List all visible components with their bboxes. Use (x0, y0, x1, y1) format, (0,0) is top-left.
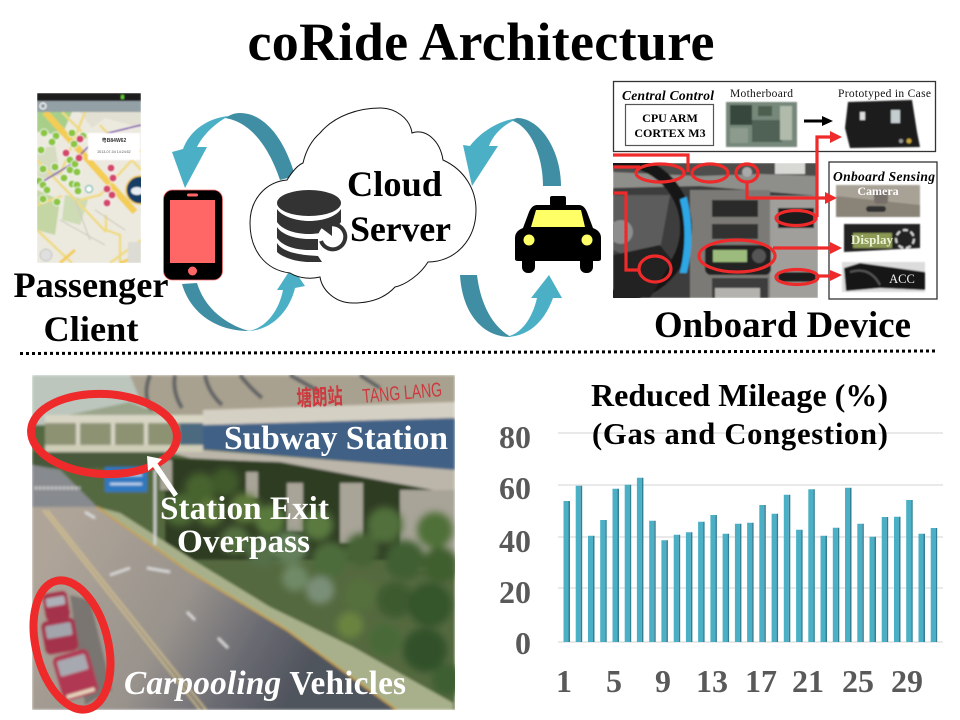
sensing heading: Onboard Sensing (833, 169, 935, 184)
CPU box (626, 104, 714, 146)
chart title: (Gas and Congestion) (592, 417, 888, 451)
arrow: taxi to cloud (463, 118, 561, 186)
subway station label: Subway Station (224, 420, 448, 457)
icon: taxi (515, 196, 601, 273)
bar side shading (568, 478, 937, 642)
y axis labels: 40 (499, 523, 531, 559)
road (32, 505, 394, 710)
panel: onboard sensing (829, 162, 937, 299)
arrow: motherboard to case (804, 116, 833, 126)
chart gridlines (558, 433, 943, 642)
arrow: cloud to phone (172, 113, 295, 188)
chart title (591, 377, 888, 451)
arrow: cloud to taxi (460, 275, 562, 337)
concrete beam (160, 450, 455, 494)
server label: Cloud (347, 164, 442, 204)
x axis labels: 1 (556, 663, 572, 699)
y axis labels: 0 (515, 625, 531, 661)
station name sign (296, 382, 442, 408)
passenger app map screenshot (37, 93, 141, 263)
chart bars (564, 478, 936, 642)
overpass (72, 402, 160, 416)
cloud server: Server (350, 209, 451, 249)
passenger app map screenshot: 粤B84W62 (102, 137, 126, 144)
cloud server (250, 108, 476, 303)
title: coRide Architecture (248, 12, 714, 72)
passenger app map screenshot: 2013-07-04 14:24:52 (97, 150, 131, 154)
station street photo (32, 375, 464, 710)
grass bank (120, 513, 453, 710)
passenger client label (14, 265, 168, 349)
y axis labels: 80 (499, 419, 531, 455)
panel: central control (614, 82, 936, 152)
passenger client label: Client (44, 309, 138, 349)
glass band (203, 418, 455, 470)
station exit overpass label (160, 490, 329, 560)
chart title: Reduced Mileage (%) (591, 377, 888, 413)
station exit overpass label: Station Exit (160, 490, 329, 527)
vegetation (164, 468, 464, 696)
x axis labels: 9 (655, 663, 671, 699)
passenger client label: Passenger (14, 265, 168, 305)
x axis labels: 17 (745, 663, 777, 699)
lane lines (43, 510, 206, 710)
y axis labels (499, 419, 531, 661)
ACC photo: ACC (889, 272, 915, 286)
x axis labels: 29 (891, 663, 923, 699)
dashboard photo (613, 163, 818, 298)
display photo: Display (851, 232, 893, 247)
arrow: phone to cloud (182, 267, 305, 331)
motherboard label: Motherboard (730, 88, 793, 100)
section divider (20, 351, 936, 354)
x axis labels: 13 (696, 663, 728, 699)
dark understory (165, 458, 455, 560)
case label: Prototyped in Case (838, 88, 931, 100)
icon: database with refresh (277, 190, 348, 262)
red ellipse: station exit overpass (29, 390, 179, 478)
station exit overpass label: Overpass (177, 523, 310, 560)
y axis labels: 60 (499, 470, 531, 506)
hillside and sky (32, 375, 162, 425)
x axis labels (556, 663, 923, 699)
sign pole (154, 470, 156, 545)
blue road sign (105, 467, 147, 492)
camera photo: Camera (857, 184, 899, 198)
taxis (40, 590, 100, 702)
central control heading: Central Control (622, 88, 714, 103)
arrow: overpass pointer (147, 456, 178, 497)
CPU box: CORTEX M3 (634, 126, 706, 140)
icon: smartphone (164, 190, 222, 280)
CPU box: CPU ARM (642, 111, 698, 125)
pillars (160, 460, 455, 570)
onboard device label: Onboard Device (654, 304, 911, 345)
station name sign: TANG LANG (361, 378, 443, 408)
x axis labels: 21 (792, 663, 824, 699)
road shadow beside taxis (70, 595, 112, 705)
x axis labels: 5 (606, 663, 622, 699)
y axis labels: 20 (499, 574, 531, 610)
carpooling vehicles label: Carpooling Vehicles (124, 665, 406, 702)
station roof (130, 375, 455, 416)
cloud outline (250, 108, 476, 303)
bar chart: reduced mileage (499, 377, 943, 699)
median hedge (97, 507, 453, 710)
red ellipse: carpooling vehicles (21, 572, 123, 718)
x axis labels: 25 (842, 663, 874, 699)
station name sign: 塘朗站 (296, 383, 343, 412)
prototype case photo (845, 100, 920, 148)
red connector lines and circled components (613, 131, 842, 284)
motherboard photo (726, 102, 797, 147)
